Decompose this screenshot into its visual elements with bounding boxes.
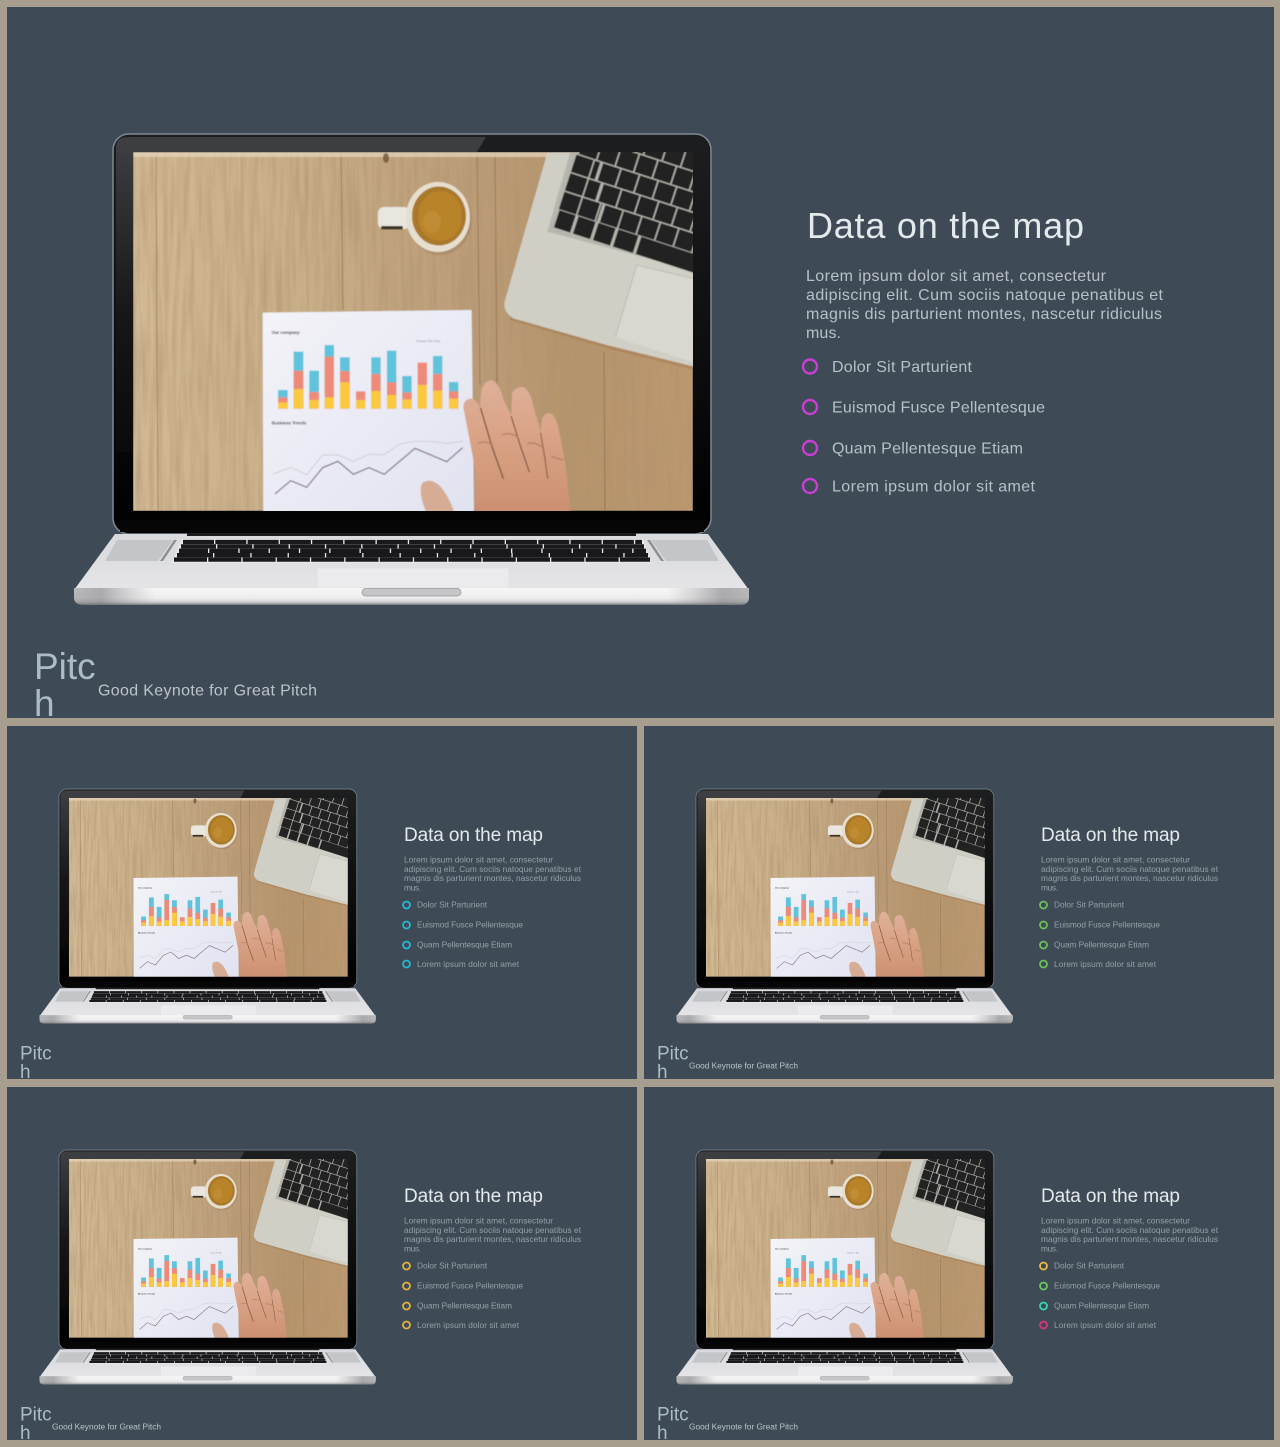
panel: cyan variant: [7, 726, 637, 1083]
bullet labels: Quam Pellentesque Etiam: [1054, 940, 1149, 950]
body text: Lorem ipsum dolor sit amet, consectetur: [1041, 1216, 1190, 1226]
body text: adipiscing elit. Cum sociis natoque penatibus et: [1041, 864, 1219, 874]
body text: mus.: [404, 1244, 421, 1254]
logo wordmark: Pitc: [657, 1404, 689, 1426]
body text: magnis dis parturient montes, nascetur ridiculus: [404, 1234, 581, 1244]
body text: Lorem ipsum dolor sit amet, consectetur: [404, 1216, 553, 1226]
bullet list: [403, 902, 410, 968]
logo wordmark: h: [20, 1423, 31, 1444]
tagline: Good Keynote for Great Pitch: [689, 1060, 798, 1070]
bullet labels: [417, 900, 523, 969]
bullet labels: Quam Pellentesque Etiam: [417, 940, 512, 950]
bullet list: [403, 1262, 410, 1328]
body text: magnis dis parturient montes, nascetur ridiculus: [1041, 1234, 1218, 1244]
bullet labels: Quam Pellentesque Etiam: [417, 1300, 512, 1310]
logo wordmark: h: [657, 1423, 668, 1444]
logo wordmark: h: [657, 1062, 668, 1083]
bullet labels: Lorem ipsum dolor sit amet: [1054, 1320, 1157, 1330]
laptop mockup: [74, 108, 782, 605]
panel: main slide: [7, 7, 1274, 724]
laptop mockup: [40, 776, 392, 1024]
body text: adipiscing elit. Cum sociis natoque penatibus et: [1041, 1225, 1219, 1235]
heading: Data on the map: [404, 1186, 543, 1207]
bullet list: [1040, 902, 1047, 968]
logo wordmark: h: [34, 683, 55, 724]
bullet labels: [1054, 1260, 1160, 1330]
logo wordmark: h: [20, 1062, 31, 1083]
body text: [806, 268, 1164, 342]
bullet 3: Quam Pellentesque Etiam: [832, 440, 1023, 458]
logo wordmark: [657, 1044, 689, 1083]
body text: mus.: [404, 882, 421, 892]
body text: mus.: [1041, 882, 1058, 892]
bullet labels: Euismod Fusce Pellentesque: [417, 1280, 523, 1290]
tagline: Good Keynote for Great Pitch: [689, 1422, 798, 1432]
logo wordmark: Pitc: [20, 1044, 52, 1064]
bullet labels: Euismod Fusce Pellentesque: [1054, 920, 1160, 930]
logo wordmark: [20, 1044, 52, 1083]
panel: gold variant: [7, 1087, 637, 1444]
body text: [1041, 1216, 1219, 1254]
heading: Data on the map: [1041, 825, 1180, 846]
heading: Data on the map: [807, 205, 1084, 246]
bullet 1: Dolor Sit Parturient: [832, 359, 973, 376]
body text: Lorem ipsum dolor sit amet, consectetur: [1041, 854, 1190, 864]
bullet labels: Lorem ipsum dolor sit amet: [1054, 959, 1157, 969]
body text: adipiscing elit. Cum sociis natoque penatibus et: [806, 287, 1164, 304]
bullet 2: Euismod Fusce Pellentesque: [832, 400, 1045, 416]
bullet labels: Lorem ipsum dolor sit amet: [417, 1320, 520, 1330]
bullet list: [803, 359, 1045, 496]
body text: [1041, 854, 1219, 892]
laptop mockup: [677, 1137, 1029, 1385]
panel: multicolour variant: [644, 1087, 1274, 1444]
body text: magnis dis parturient montes, nascetur ridiculus: [404, 873, 581, 883]
body text: Lorem ipsum dolor sit amet, consectetur: [404, 854, 553, 864]
body text: [404, 854, 582, 892]
body text: mus.: [1041, 1244, 1058, 1254]
body text: adipiscing elit. Cum sociis natoque penatibus et: [404, 864, 582, 874]
bullet labels: Euismod Fusce Pellentesque: [1054, 1280, 1160, 1290]
bullet labels: [1054, 900, 1160, 969]
body text: mus.: [806, 325, 841, 342]
body text: [404, 1216, 582, 1254]
bullet labels: Quam Pellentesque Etiam: [1054, 1300, 1149, 1310]
bullet labels: Euismod Fusce Pellentesque: [417, 920, 523, 930]
bullet labels: Dolor Sit Parturient: [1054, 900, 1125, 910]
bullet 4: Lorem ipsum dolor sit amet: [832, 478, 1036, 496]
tagline: Good Keynote for Great Pitch: [52, 1422, 161, 1432]
logo wordmark: Pitc: [20, 1404, 52, 1426]
bullet labels: Dolor Sit Parturient: [1054, 1260, 1125, 1270]
body text: Lorem ipsum dolor sit amet, consectetur: [806, 268, 1107, 285]
heading: Data on the map: [404, 825, 543, 846]
panel: green variant: [644, 726, 1274, 1083]
laptop mockup: [677, 776, 1029, 1024]
logo wordmark: Pitc: [657, 1044, 689, 1064]
heading: Data on the map: [1041, 1186, 1180, 1207]
logo wordmark: [34, 646, 96, 724]
laptop mockup: [40, 1137, 392, 1385]
body text: magnis dis parturient montes, nascetur ridiculus: [806, 306, 1162, 323]
bullet labels: Dolor Sit Parturient: [417, 1260, 488, 1270]
bullet labels: [417, 1260, 523, 1330]
logo wordmark: [657, 1404, 689, 1444]
logo wordmark: [20, 1404, 52, 1444]
tagline: Good Keynote for Great Pitch: [98, 682, 317, 700]
body text: adipiscing elit. Cum sociis natoque penatibus et: [404, 1225, 582, 1235]
bullet list: [1040, 1262, 1047, 1328]
bullet labels: Dolor Sit Parturient: [417, 900, 488, 910]
body text: magnis dis parturient montes, nascetur ridiculus: [1041, 873, 1218, 883]
bullet labels: Lorem ipsum dolor sit amet: [417, 959, 520, 969]
logo wordmark: Pitc: [34, 646, 96, 687]
